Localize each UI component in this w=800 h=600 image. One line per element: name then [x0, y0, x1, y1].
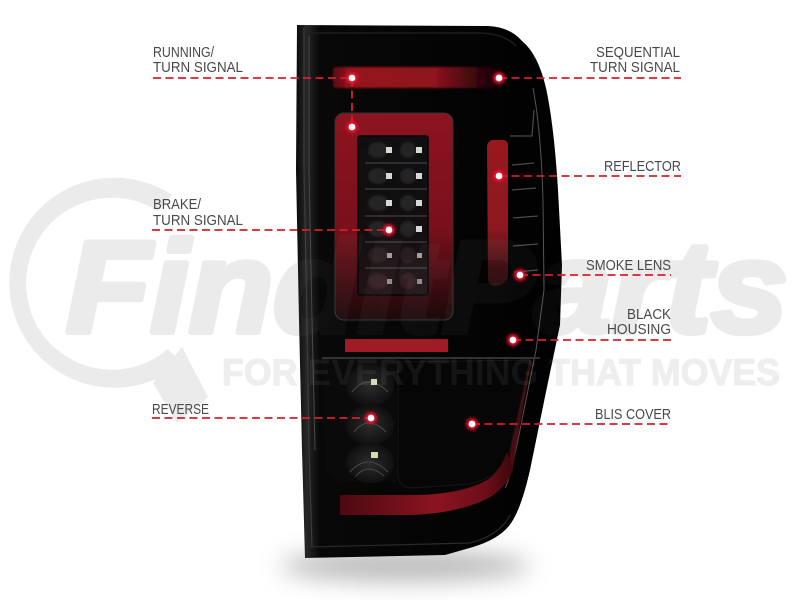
callout: sequential turn signal: TURN SIGNAL	[590, 59, 680, 76]
brake frame red surround	[335, 113, 453, 320]
reverse LED chips	[371, 379, 377, 385]
tail lamp	[296, 25, 562, 558]
callout: black housing: HOUSING	[607, 321, 671, 338]
lamp ground shadow	[280, 551, 530, 581]
callout: sequential turn signal	[493, 44, 681, 84]
lamp left edge highlights	[304, 28, 516, 548]
watermark logo	[9, 178, 788, 423]
watermark: magnifier handle	[153, 347, 208, 423]
callout: blis cover: BLIS COVER	[595, 406, 671, 423]
callout: brake turn signal	[152, 196, 395, 236]
lower red reflector strip	[345, 339, 448, 352]
callout: blis cover	[466, 406, 671, 430]
watermark: magnifier ring	[9, 178, 182, 388]
callout: reflector: REFLECTOR	[604, 158, 681, 175]
LED panel	[358, 136, 428, 295]
callout: reverse	[152, 401, 377, 424]
reverse lens swirl texture	[350, 382, 388, 476]
watermark showing through lamp	[310, 359, 552, 385]
LED reflector shading	[368, 142, 416, 289]
callout: smoke lens: SMOKE LENS	[586, 257, 671, 274]
callout: black housing	[507, 306, 671, 346]
watermark: tagline: FOR EVERYTHING THAT MOVES	[222, 352, 780, 393]
lamp body	[296, 25, 562, 558]
bottom red light bar	[340, 452, 513, 515]
BLIS cover panel	[398, 360, 530, 488]
callout: running turn signal: TURN SIGNAL	[153, 59, 243, 76]
callout: smoke lens	[514, 257, 671, 281]
callout: reverse: REVERSE	[152, 401, 209, 418]
reverse lamp cluster	[322, 358, 540, 483]
watermark: brand name: FindItParts	[66, 214, 788, 360]
top red light bar	[333, 67, 499, 88]
callout: brake turn signal: TURN SIGNAL	[153, 212, 243, 229]
LED chips	[386, 147, 422, 284]
callout: brake turn signal: BRAKE/	[153, 196, 202, 213]
callout: reflector	[493, 158, 681, 182]
inner lens outline on right	[505, 88, 544, 488]
callout: black housing: BLACK	[627, 306, 671, 323]
LED row dividers	[365, 163, 427, 268]
callout: sequential turn signal: SEQUENTIAL	[596, 44, 680, 61]
side chrome reflector details	[510, 110, 538, 272]
watermark showing through lamp: FOR EVERYTHING THAT MOVES	[222, 352, 780, 393]
side reflector	[487, 140, 508, 286]
callout: running turn signal: RUNNING/	[153, 44, 215, 61]
watermark showing through lamp: FindItParts	[66, 214, 788, 360]
callout: running turn signal	[153, 44, 358, 133]
